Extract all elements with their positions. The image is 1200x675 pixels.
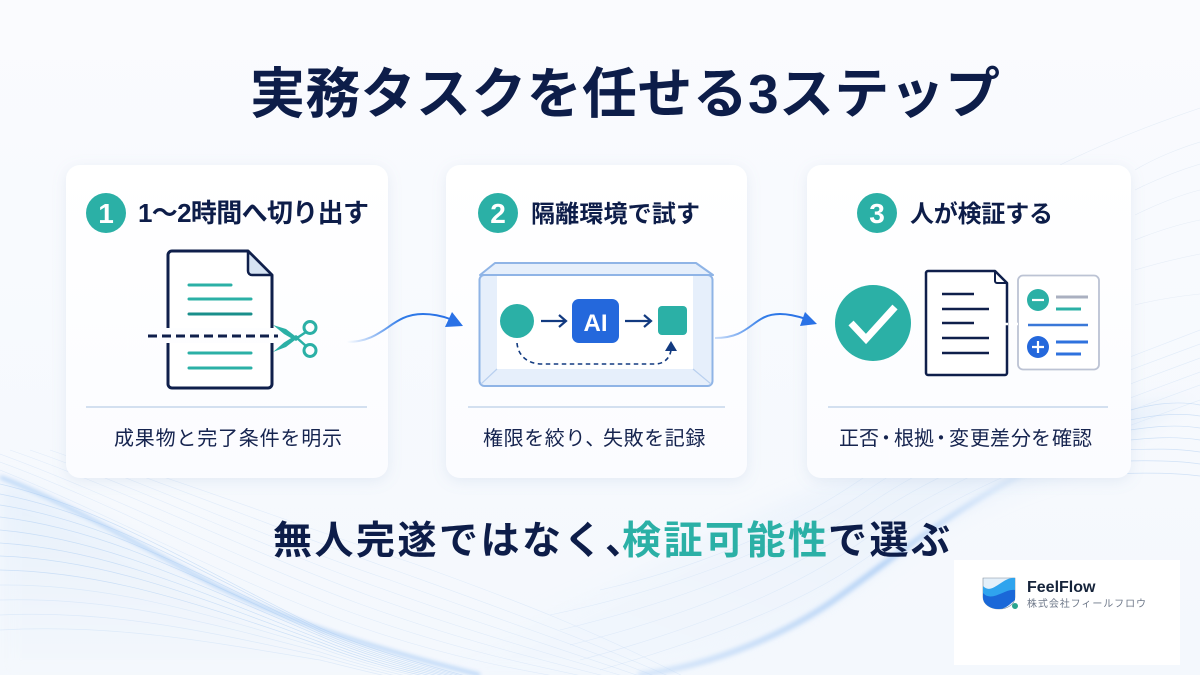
step 3 heading: 人が検証する [910,200,1053,228]
step 1 heading: 1〜2時間へ切り出す [138,198,369,228]
panel: step 1 [66,165,388,478]
icon: check circle [835,285,911,361]
flow arrow [625,315,651,327]
step 1 caption: 成果物と完了条件を明示 [114,427,343,450]
step 3 caption: 正否・根拠・変更差分を確認 [839,427,1092,450]
icon: scissors [273,322,316,356]
logo subtitle: 株式会社フィールフロウ [1027,597,1146,610]
step 1 heading: 1 [98,198,114,229]
step 3 heading: 3 [869,198,885,229]
flow: AI box: AI [584,310,608,337]
step 1 heading [86,193,369,233]
flow: end node [658,306,687,335]
conclusion message: で選ぶ [828,520,953,563]
arrow: step 1 to 2 [347,312,463,342]
arrow: step 2 to 3 [715,312,817,338]
icon: sandbox box [480,263,713,386]
flow: AI box [572,299,619,343]
conclusion message: 無人完遂ではなく、 [273,520,647,563]
flow: start node [500,304,534,338]
icon: document with cut line [148,251,278,388]
step 2 caption: 権限を絞り、 [483,428,606,450]
icon: diff panel [1005,276,1099,370]
step 2 caption: 失敗を記録 [603,427,706,450]
logo block [954,560,1180,665]
step 2 heading: 2 [490,198,506,229]
title: 実務タスクを任せる3ステップ [250,63,1000,125]
dashed feedback arrow [517,341,677,364]
flow arrow [541,315,566,327]
logo mark [983,578,1018,609]
panel: step 2 [446,165,747,478]
step 2 heading [478,193,700,233]
conclusion message: 検証可能性 [622,520,830,563]
step 2 heading: 隔離環境で試す [531,201,700,228]
logo name: FeelFlow [1027,579,1096,596]
step 3 heading [857,193,1053,233]
panel: step 3 [807,165,1131,478]
icon: reviewed document [926,271,1007,375]
